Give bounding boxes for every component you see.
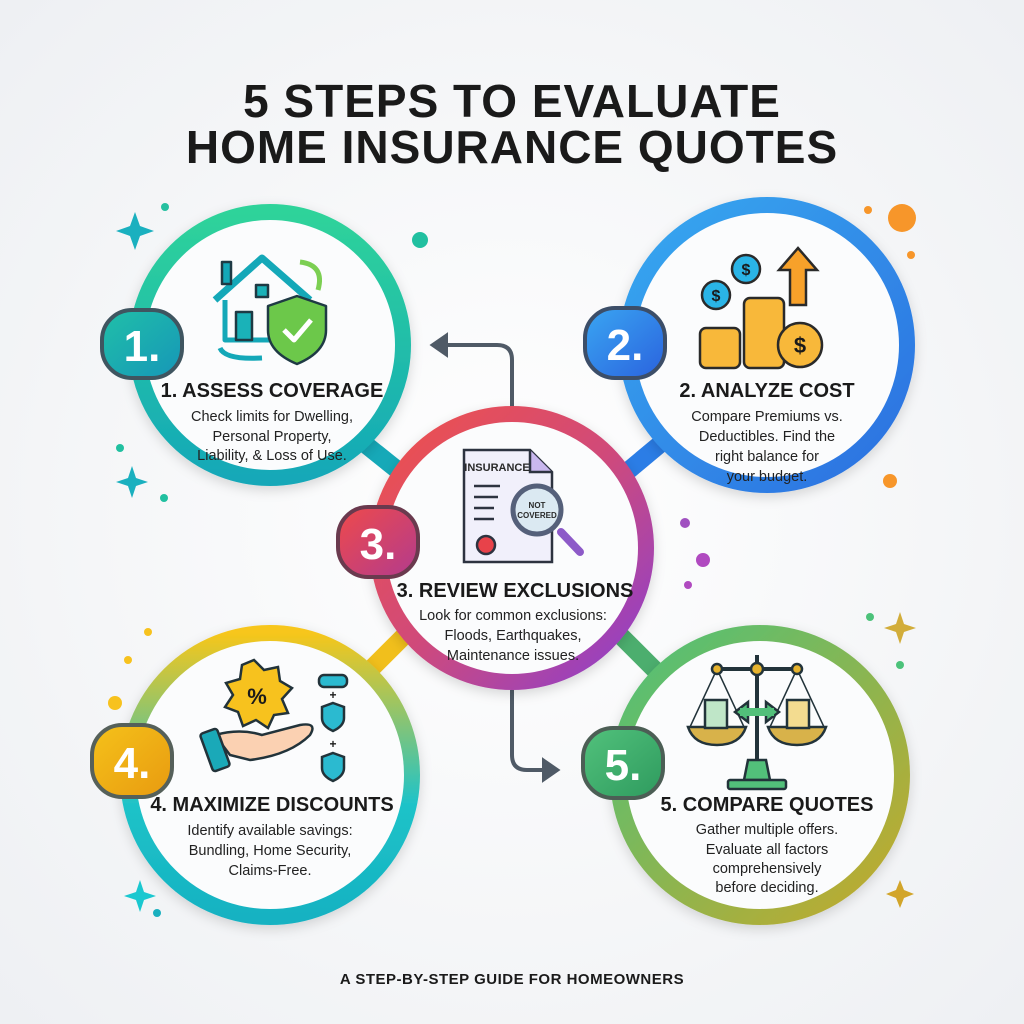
badge: 3: 3. <box>360 520 396 569</box>
footer subtitle: A STEP-BY-STEP GUIDE FOR HOMEOWNERS <box>340 971 684 988</box>
icon: hand with discount badge <box>200 660 347 781</box>
text block: comprehensively <box>713 861 822 877</box>
text block <box>696 822 838 896</box>
text block: your budget. <box>727 469 807 485</box>
panel: step 2 analyze cost: $ <box>794 333 806 358</box>
text block: Identify available savings: <box>187 823 353 839</box>
badge: 1 <box>102 310 182 378</box>
heading: 4. MAXIMIZE DISCOUNTS <box>150 794 394 816</box>
arrow: from step 3 to step 1 <box>433 336 512 412</box>
icon: house with shield <box>215 258 326 364</box>
text block: Personal Property, <box>212 429 332 445</box>
panel: step 4 maximize discounts: + <box>329 737 337 751</box>
icon: coins and arrow <box>700 248 822 368</box>
panel: step 2 analyze cost: $ <box>742 262 751 279</box>
panel: step 5 compare quotes <box>618 633 902 917</box>
text block: Maintenance issues. <box>447 648 579 664</box>
text block: right balance for <box>715 449 819 465</box>
panel: step 3 review exclusions: COVERED <box>517 511 557 520</box>
panel: step 3 review exclusions: NOT <box>529 501 546 510</box>
panel: step 4 maximize discounts: % <box>247 684 267 709</box>
text block: Compare Premiums vs. <box>691 409 843 425</box>
text block: Claims-Free. <box>229 863 311 879</box>
icon: insurance document with magnifier <box>464 450 580 562</box>
connector: 5 to 3 <box>615 630 665 680</box>
badge: 1: 1. <box>124 322 160 371</box>
heading: 3. REVIEW EXCLUSIONS <box>397 580 633 602</box>
connector: 4 to 3 <box>360 630 410 680</box>
decorations: sparkles and dots <box>108 203 916 917</box>
heading: 2. ANALYZE COST <box>679 380 855 402</box>
text block <box>187 823 353 879</box>
heading: 1. ASSESS COVERAGE <box>161 380 383 402</box>
icon: balance scale <box>688 655 826 789</box>
text block: Look for common exclusions: <box>419 608 607 624</box>
badge: 2: 2. <box>607 321 643 370</box>
text block <box>691 409 843 485</box>
connector: 2 to 3 <box>605 440 665 490</box>
panel: step 1 assess coverage <box>137 212 403 478</box>
text block <box>191 409 353 464</box>
panel: step 4 maximize discounts: + <box>329 688 337 702</box>
badge: 5: 5. <box>605 741 641 790</box>
badge: 3 <box>338 507 418 577</box>
text block: Deductibles. Find the <box>699 429 835 445</box>
title: HOME INSURANCE QUOTES <box>186 121 838 173</box>
text block: Gather multiple offers. <box>696 822 838 838</box>
text block: before deciding. <box>715 880 819 896</box>
text block <box>419 608 607 664</box>
panel: step 2 analyze cost <box>627 205 907 485</box>
text block: Liability, & Loss of Use. <box>197 448 347 464</box>
badge: 2 <box>585 308 665 378</box>
badge: 4: 4. <box>114 739 150 788</box>
text block: Evaluate all factors <box>706 842 828 858</box>
text block: Bundling, Home Security, <box>189 843 351 859</box>
panel: step 4 maximize discounts <box>128 633 412 917</box>
text block: Check limits for Dwelling, <box>191 409 353 425</box>
badge: 5 <box>583 728 663 798</box>
title: 5 STEPS TO EVALUATE <box>243 75 781 127</box>
heading: 5. COMPARE QUOTES <box>660 794 874 816</box>
panel: step 3 review exclusions: INSURANCE <box>464 462 530 474</box>
title <box>186 75 838 173</box>
panel: step 2 analyze cost: $ <box>712 288 721 305</box>
panel: step 3 review exclusions <box>378 414 646 682</box>
badge: 4 <box>92 725 172 797</box>
text block: Floods, Earthquakes, <box>444 628 582 644</box>
arrow: from step 3 to step 5 <box>512 690 557 779</box>
connector: 1 to 3 <box>360 440 420 488</box>
